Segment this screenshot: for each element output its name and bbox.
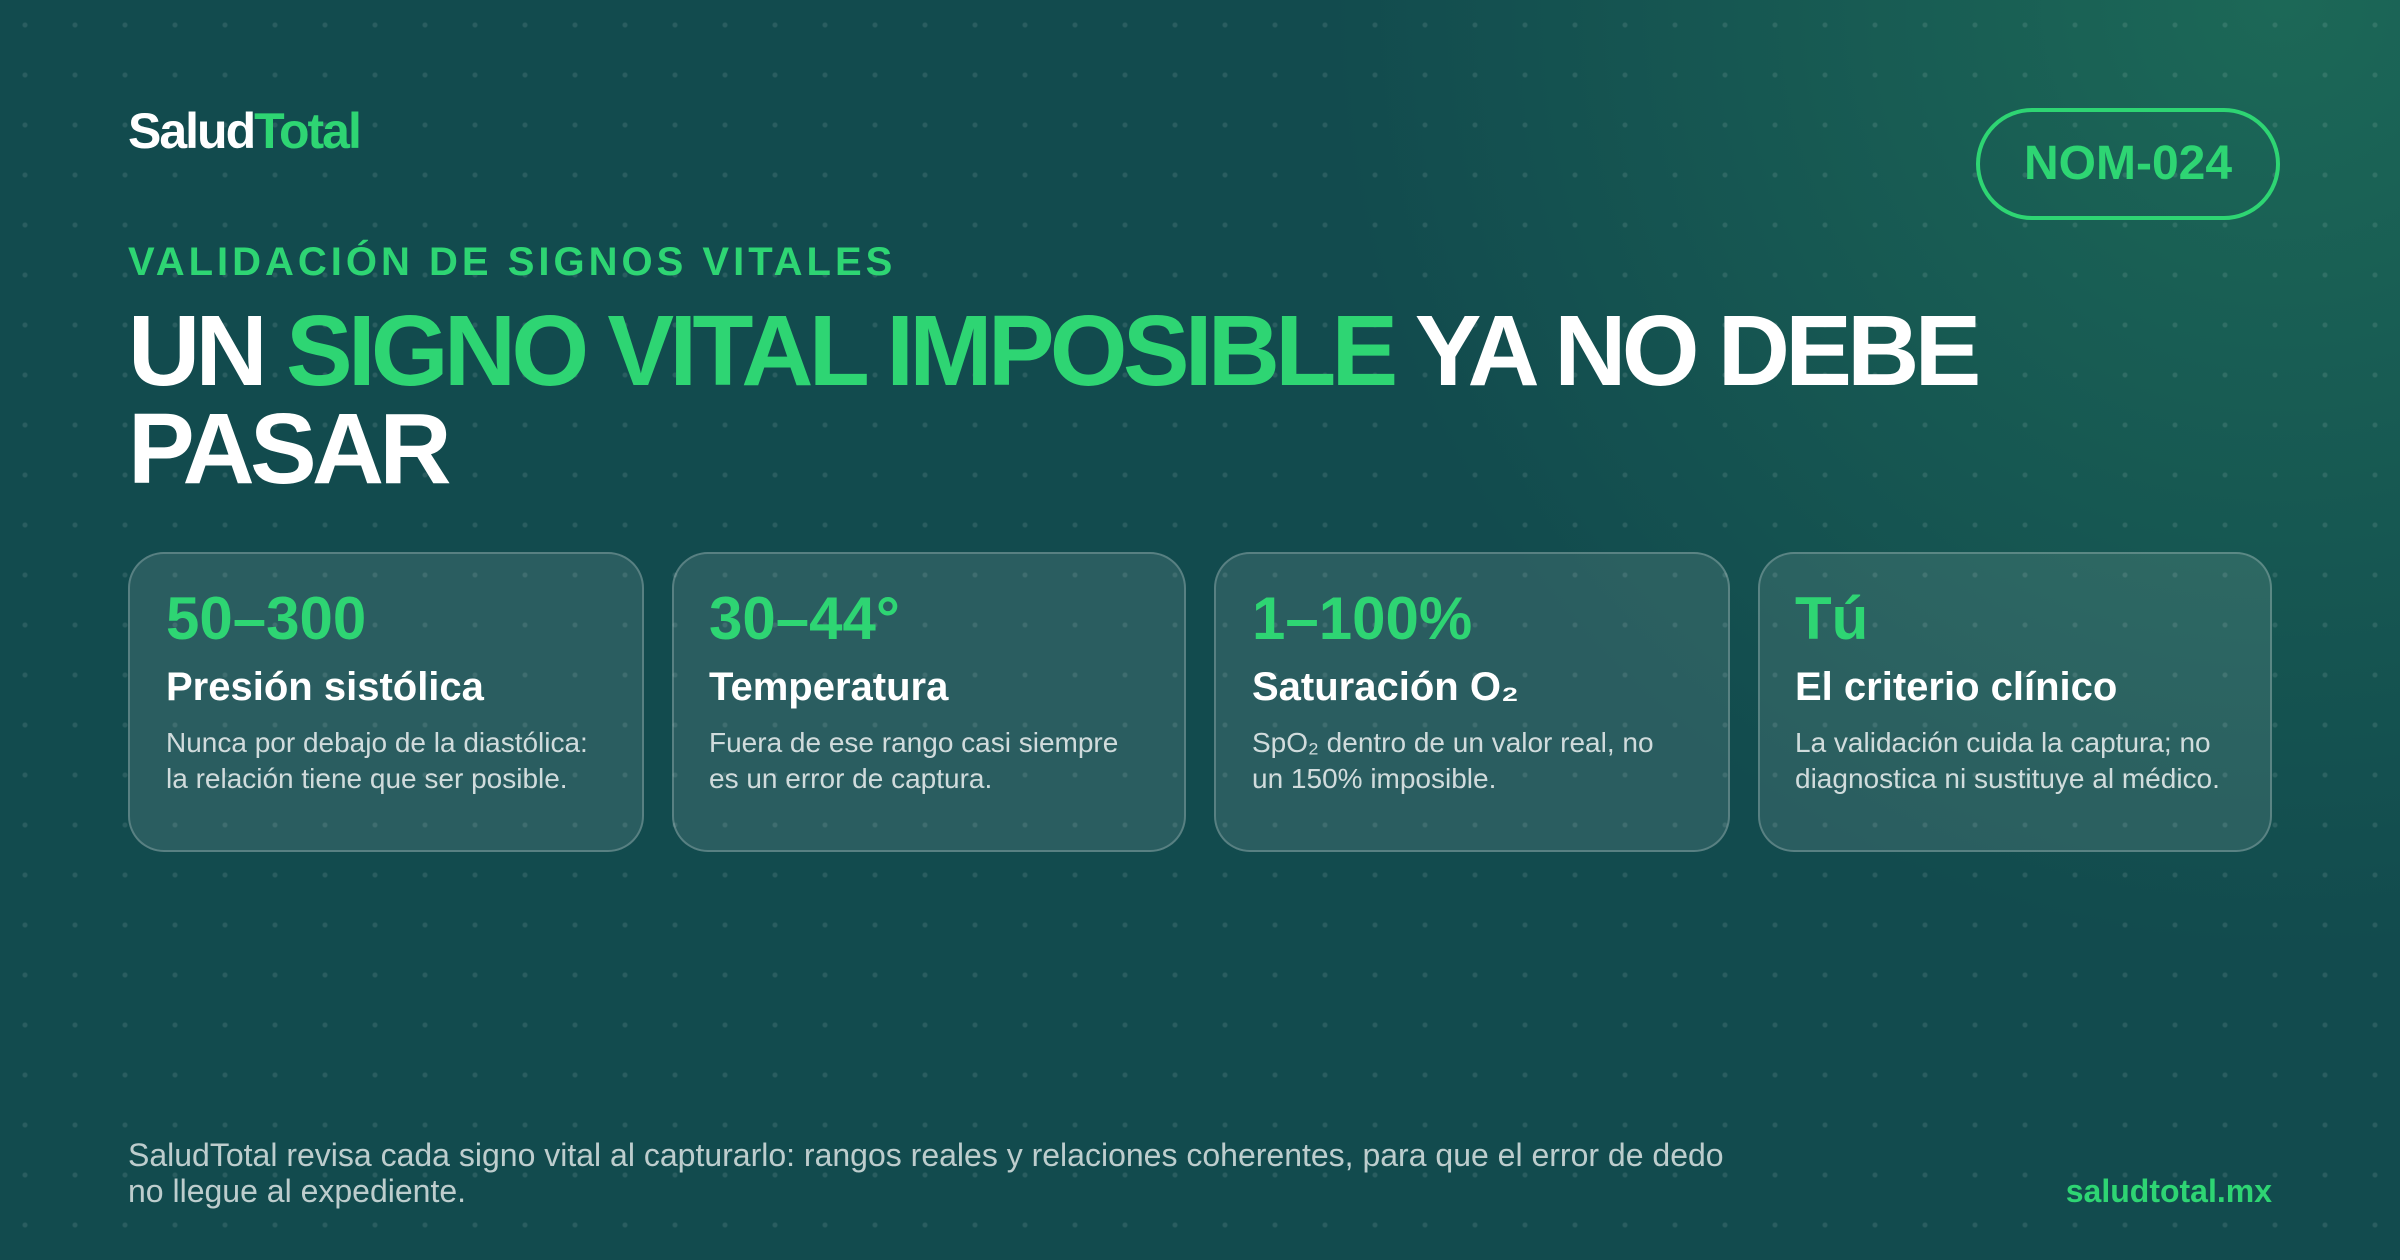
footer url: saludtotal.mx (2066, 1173, 2272, 1209)
footer text: SaludTotal revisa cada signo vital al capturarlo: rangos reales y relaciones coherentes, para que el error de dedo (128, 1137, 1724, 1173)
description (709, 727, 1118, 794)
description: Nunca por debajo de la diastólica: (166, 727, 588, 758)
label: Presión sistólica (166, 665, 484, 709)
description: SpO₂ dentro de un valor real, no (1252, 727, 1654, 758)
description (1252, 727, 1654, 794)
panel: criterio clínico (1758, 552, 2272, 852)
label: El criterio clínico (1795, 665, 2117, 709)
footer text (128, 1137, 1724, 1209)
description: La validación cuida la captura; no (1795, 727, 2211, 758)
badge: NOM-024: NOM-024 (2024, 137, 2232, 190)
panel: presión sistólica (128, 552, 644, 852)
label: Saturación O₂ (1252, 665, 1519, 709)
description: diagnostica ni sustituye al médico. (1795, 763, 2220, 794)
description (166, 727, 588, 794)
value: 30–44° (709, 585, 900, 652)
panel: temperatura (672, 552, 1186, 852)
value: 1–100% (1252, 585, 1472, 652)
badge: NOM-024 (1976, 108, 2280, 220)
value: Tú (1795, 585, 1868, 652)
panel: saturación (1214, 552, 1730, 852)
description: la relación tiene que ser posible. (166, 763, 568, 794)
description (1795, 727, 2220, 794)
label: Temperatura (709, 665, 948, 709)
description: es un error de captura. (709, 763, 992, 794)
logo: SaludTotal (128, 103, 360, 159)
eyebrow heading: VALIDACIÓN DE SIGNOS VITALES (128, 240, 896, 284)
footer text: no llegue al expediente. (128, 1173, 466, 1209)
description: Fuera de ese rango casi siempre (709, 727, 1118, 758)
description: un 150% imposible. (1252, 763, 1496, 794)
title: UN SIGNO VITAL IMPOSIBLE YA NO DEBE PASAR (128, 295, 1977, 505)
value: 50–300 (166, 585, 366, 652)
